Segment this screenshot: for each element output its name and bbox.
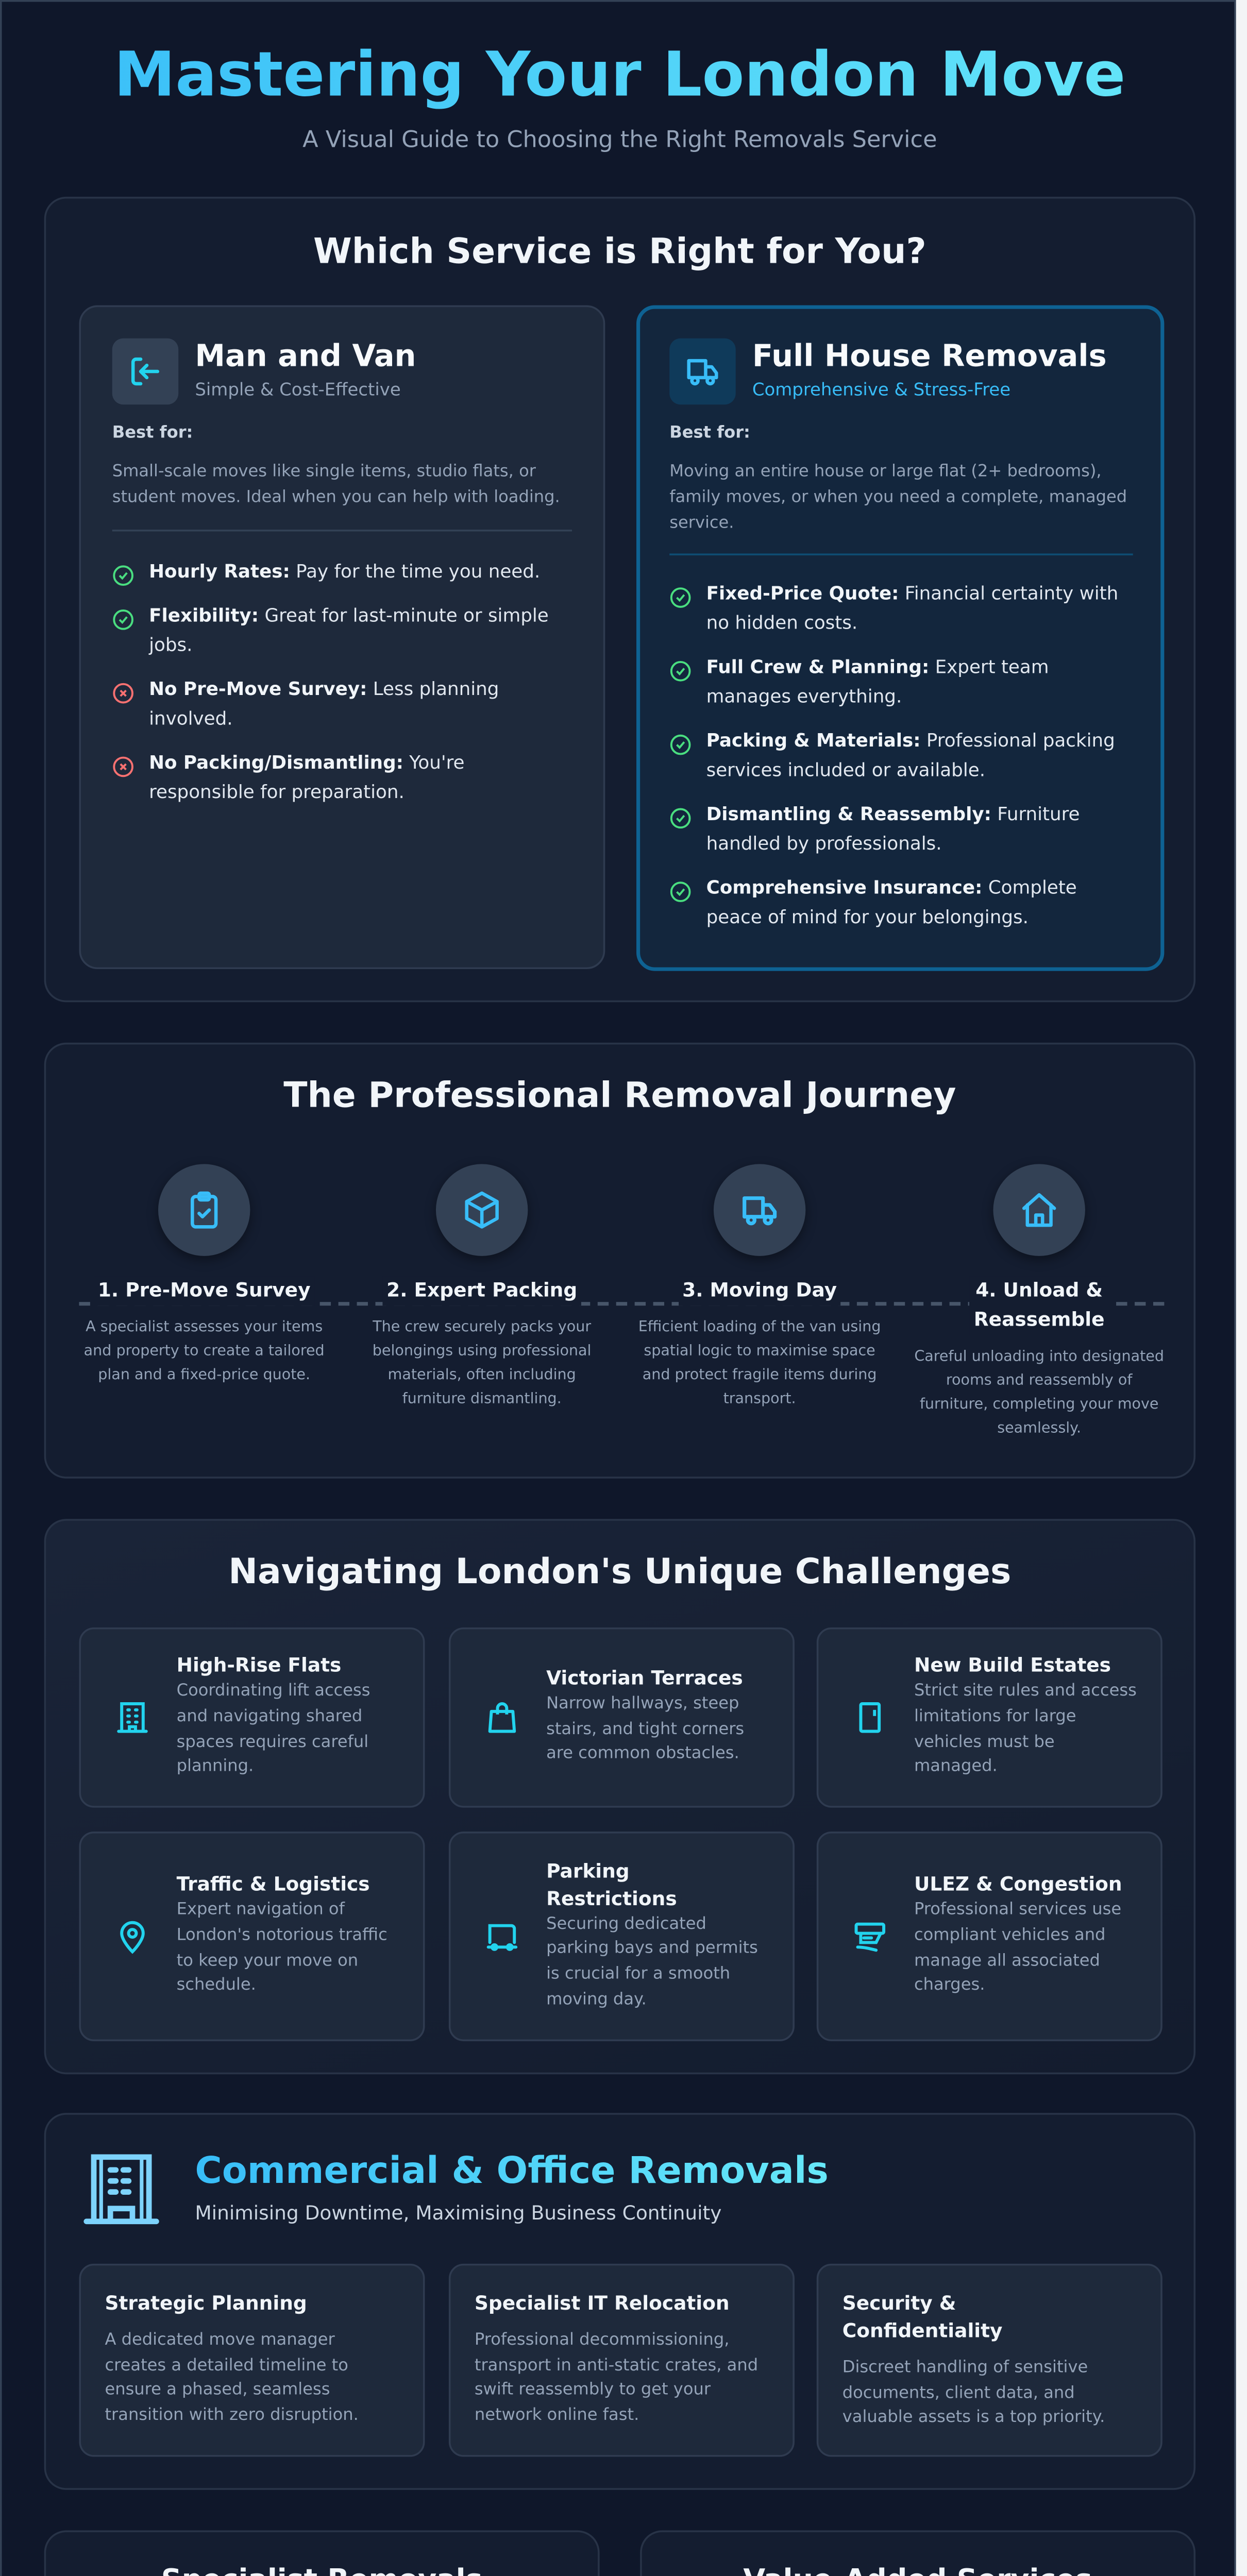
challenge: victorian: Narrow hallways, steep stairs, and tight corners are common obstacles.: [546, 1696, 744, 1764]
step 2: The crew securely packs your belongings using professional materials, often including furniture dismantling.: [373, 1318, 591, 1407]
icon: box: [436, 1164, 528, 1256]
panel: commercial: [44, 2113, 1195, 2490]
feature list: Hourly Rates: Pay for the time you need.: [149, 563, 540, 583]
heading: challenges: Navigating London's Unique Challenges: [228, 1552, 1011, 1592]
card: strategic planning: Strategic Planning: [105, 2293, 307, 2315]
challenge: new build: Strict site rules and access limitations for large vehicles must be managed.: [914, 1683, 1137, 1777]
icon: exit arrow: [112, 338, 178, 404]
panel: specialist removals: [44, 2530, 600, 2576]
challenge: high-rise: [79, 1628, 425, 1808]
heading: journey: The Professional Removal Journey: [283, 1076, 956, 1116]
step 3: [638, 1164, 881, 1407]
challenge: victorian: [449, 1628, 795, 1808]
feature list: [670, 585, 1118, 929]
best for: Best for:: [669, 425, 750, 443]
feature list: Packing & Materials: Professional packing services included or available.: [706, 732, 1115, 782]
card: strategic planning: A dedicated move manager creates a detailed timeline to ensure a phased, seamless transition with zero disruption.: [105, 2332, 359, 2426]
card: IT relocation: Professional decommissioning, transport in anti-static crates, and swift reassembly to get your network online fast.: [475, 2332, 758, 2426]
icon: office building: [83, 2155, 159, 2225]
challenge: traffic: Traffic & Logistics: [177, 1874, 370, 1896]
panel: removal journey: [44, 1043, 1195, 1479]
feature list: Flexibility: Great for last-minute or simple jobs.: [149, 607, 549, 656]
card: security: Security &: [842, 2293, 956, 2315]
challenge: ulez: ULEZ & Congestion: [914, 1874, 1122, 1896]
subtitle: A Visual Guide to Choosing the Right Removals Service: [302, 125, 937, 152]
panel: which service: [44, 197, 1195, 1002]
feature list: No Packing/Dismantling: You're responsible for preparation.: [149, 754, 465, 804]
card: IT relocation: Specialist IT Relocation: [475, 2293, 730, 2315]
step 2: 2. Expert Packing: [386, 1280, 577, 1302]
icon: truck: [669, 338, 736, 404]
step 3: Efficient loading of the van using spatial logic to maximise space and protect fragile items during transport.: [638, 1318, 881, 1407]
challenge: ulez: [817, 1832, 1162, 2041]
best for: [669, 425, 1127, 533]
step 4: [914, 1164, 1164, 1436]
title: [2, 31, 1238, 120]
card: security: [817, 2264, 1162, 2457]
card: strategic planning: [79, 2264, 425, 2457]
step 4: 4. Unload &: [975, 1280, 1103, 1302]
challenge: new build: [817, 1628, 1162, 1808]
panel: london challenges: [44, 1519, 1195, 2074]
challenge: ulez: Professional services use compliant vehicles and manage all associated charges.: [914, 1902, 1121, 1995]
challenge: parking: Restrictions: [546, 1888, 677, 1910]
card: security: Confidentiality: [842, 2320, 1003, 2343]
heading: commercial: Commercial & Office Removals: [195, 2148, 829, 2192]
feature list: Comprehensive Insurance: Complete peace of mind for your belongings.: [706, 879, 1077, 929]
heading: which service: Which Service is Right for You?: [313, 232, 926, 272]
feature list: Full Crew & Planning: Expert team manages everything.: [706, 658, 1049, 708]
step 4: Reassemble: [974, 1309, 1105, 1331]
step 1: A specialist assesses your items and property to create a tailored plan and a fixed-price quote.: [84, 1318, 325, 1383]
steps: [84, 1164, 1164, 1436]
challenge: victorian: Victorian Terraces: [546, 1668, 743, 1690]
challenge: parking: Parking: [546, 1860, 630, 1883]
icon: house: [993, 1164, 1085, 1256]
challenge: traffic: [79, 1832, 425, 2041]
challenge: parking: [449, 1832, 795, 2041]
subheading: Minimising Downtime, Maximising Business Continuity: [195, 2203, 721, 2225]
card: full house removals: [636, 306, 1164, 971]
icon: truck: [714, 1164, 805, 1256]
title: Mastering Your London Move: [114, 39, 1125, 110]
card title: Full House Removals: [752, 338, 1107, 374]
panel: value-added: [640, 2530, 1195, 2576]
challenge: traffic: Expert navigation of London's notorious traffic to keep your move on schedule.: [177, 1902, 387, 1995]
feature list: Fixed-Price Quote: Financial certainty with no hidden costs.: [706, 585, 1118, 634]
feature list: Dismantling & Reassembly: Furniture handled by professionals.: [706, 805, 1080, 855]
best for: [112, 425, 560, 507]
feature list: [113, 563, 549, 804]
challenge: new build: New Build Estates: [914, 1655, 1111, 1677]
step 3: 3. Moving Day: [682, 1280, 837, 1302]
step 2: [373, 1164, 592, 1407]
best for: Small-scale moves like single items, studio flats, or student moves. Ideal when you can help with loading.: [112, 463, 560, 507]
step 1: 1. Pre-Move Survey: [98, 1280, 311, 1302]
challenge: parking: Securing dedicated parking bays and permits is crucial for a smooth moving day.: [546, 1916, 758, 2009]
card subtitle: Comprehensive & Stress-Free: [752, 381, 1010, 401]
card: security: Discreet handling of sensitive documents, client data, and valuable assets is a top priority.: [842, 2359, 1105, 2428]
step 1: [84, 1164, 325, 1383]
best for: Best for:: [112, 425, 193, 443]
challenge: high-rise: High-Rise Flats: [177, 1655, 341, 1677]
card: IT relocation: [449, 2264, 795, 2457]
card subtitle: Simple & Cost-Effective: [195, 381, 401, 401]
best for: Moving an entire house or large flat (2+ bedrooms), family moves, or when you need a complete, managed service.: [669, 463, 1127, 533]
card title: Man and Van: [195, 338, 416, 374]
feature list: No Pre-Move Survey: Less planning involved.: [149, 681, 499, 730]
step 4: Careful unloading into designated rooms and reassembly of furniture, completing your move seamlessly.: [914, 1348, 1164, 1436]
icon: clipboard: [158, 1164, 250, 1256]
challenge: high-rise: Coordinating lift access and navigating shared spaces requires careful planning.: [177, 1683, 370, 1777]
card: man and van: [79, 306, 605, 969]
